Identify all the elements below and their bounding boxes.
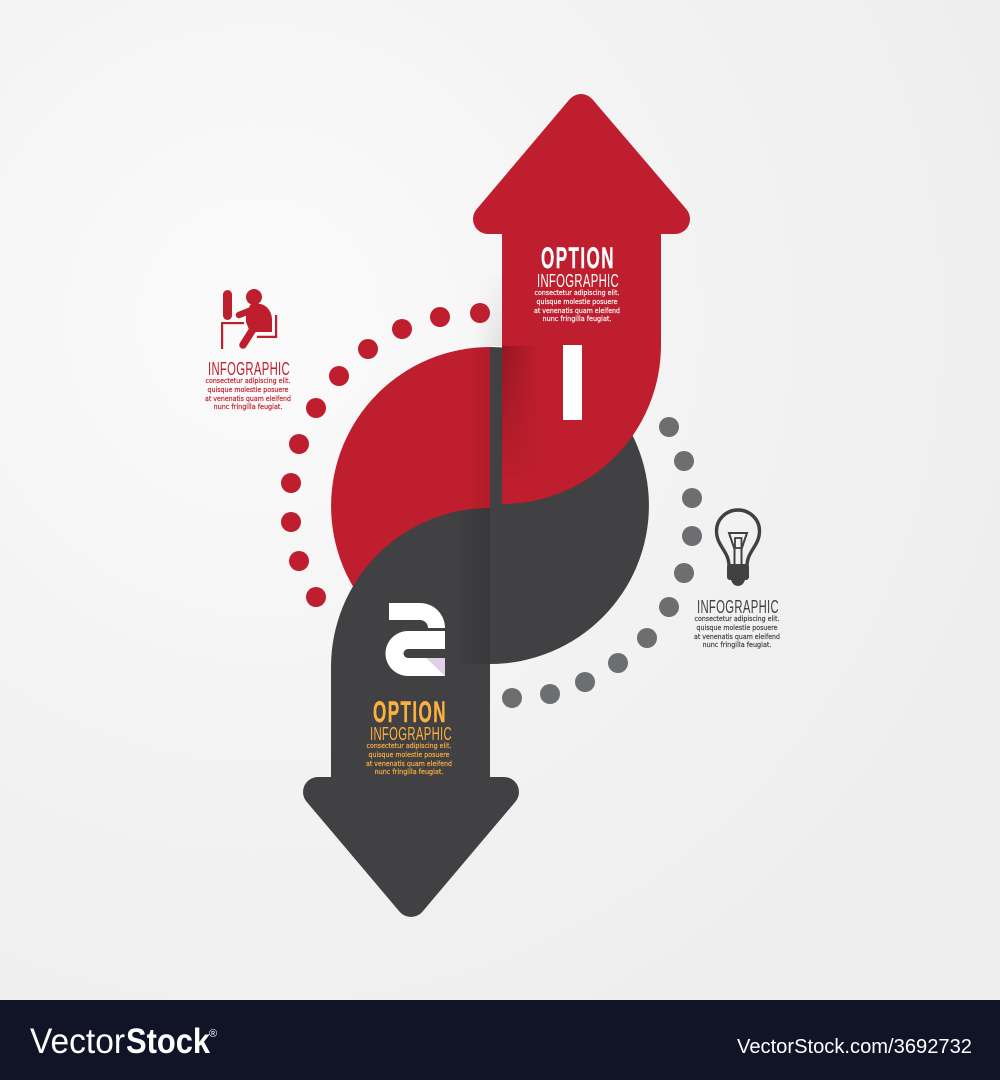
footer logo: ® [209,1028,217,1040]
footer logo: Stock [126,1022,210,1061]
text block: option 1: quisque molestie posuere [536,298,618,306]
red half disc [331,347,490,665]
text block: right: quisque molestie posuere [696,624,778,632]
text block: option 2: quisque molestie posuere [368,751,450,759]
text block: left: INFOGRAPHIC [208,359,290,379]
number 2 [386,603,445,676]
text block: left: nunc fringilla feugiat. [214,403,282,411]
footer logo [30,1022,217,1061]
text block: right: nunc fringilla feugiat. [702,641,772,649]
text block: right: at venenatis quam eleifend [694,633,780,641]
text block: right: consectetur adipiscing elit. [694,615,780,623]
text block: option 2: INFOGRAPHIC [370,724,452,744]
icon: light bulb [716,510,760,586]
text block: left [205,359,291,411]
text block: option 1: nunc fringilla feugiat. [542,315,612,323]
number 1 [563,345,582,420]
text block: left: consectetur adipiscing elit. [206,377,290,385]
text block: left: quisque molestie posuere [208,386,288,394]
text block: option 1: OPTION [541,242,615,275]
text block: option 1: at venenatis quam eleifend [534,307,620,315]
text block: right: INFOGRAPHIC [697,597,779,617]
text block: left: at venenatis quam eleifend [205,395,291,403]
dark half disc [490,347,649,664]
text block: option 2: consectetur adipiscing elit. [366,742,452,750]
icon: person at desk [221,289,277,349]
footer id: VectorStock.com/3692732 [737,1036,972,1058]
text block: option 1: consectetur adipiscing elit. [534,289,620,297]
text block: option 2: nunc fringilla feugiat. [374,768,444,776]
text block: option 2: OPTION [373,696,447,729]
footer bar [0,1000,1000,1080]
text block: option 2: at venenatis quam eleifend [366,760,452,768]
footer logo: Vector [30,1022,125,1061]
text block: right [694,597,780,649]
text block: option 1: INFOGRAPHIC [537,271,619,291]
red arrow [473,94,690,504]
dotted arc: grey [502,417,702,708]
dotted arc: red [281,303,490,607]
dark arrow [303,506,519,917]
text block: option 2 [366,696,452,776]
text block: option 1 [534,242,620,323]
